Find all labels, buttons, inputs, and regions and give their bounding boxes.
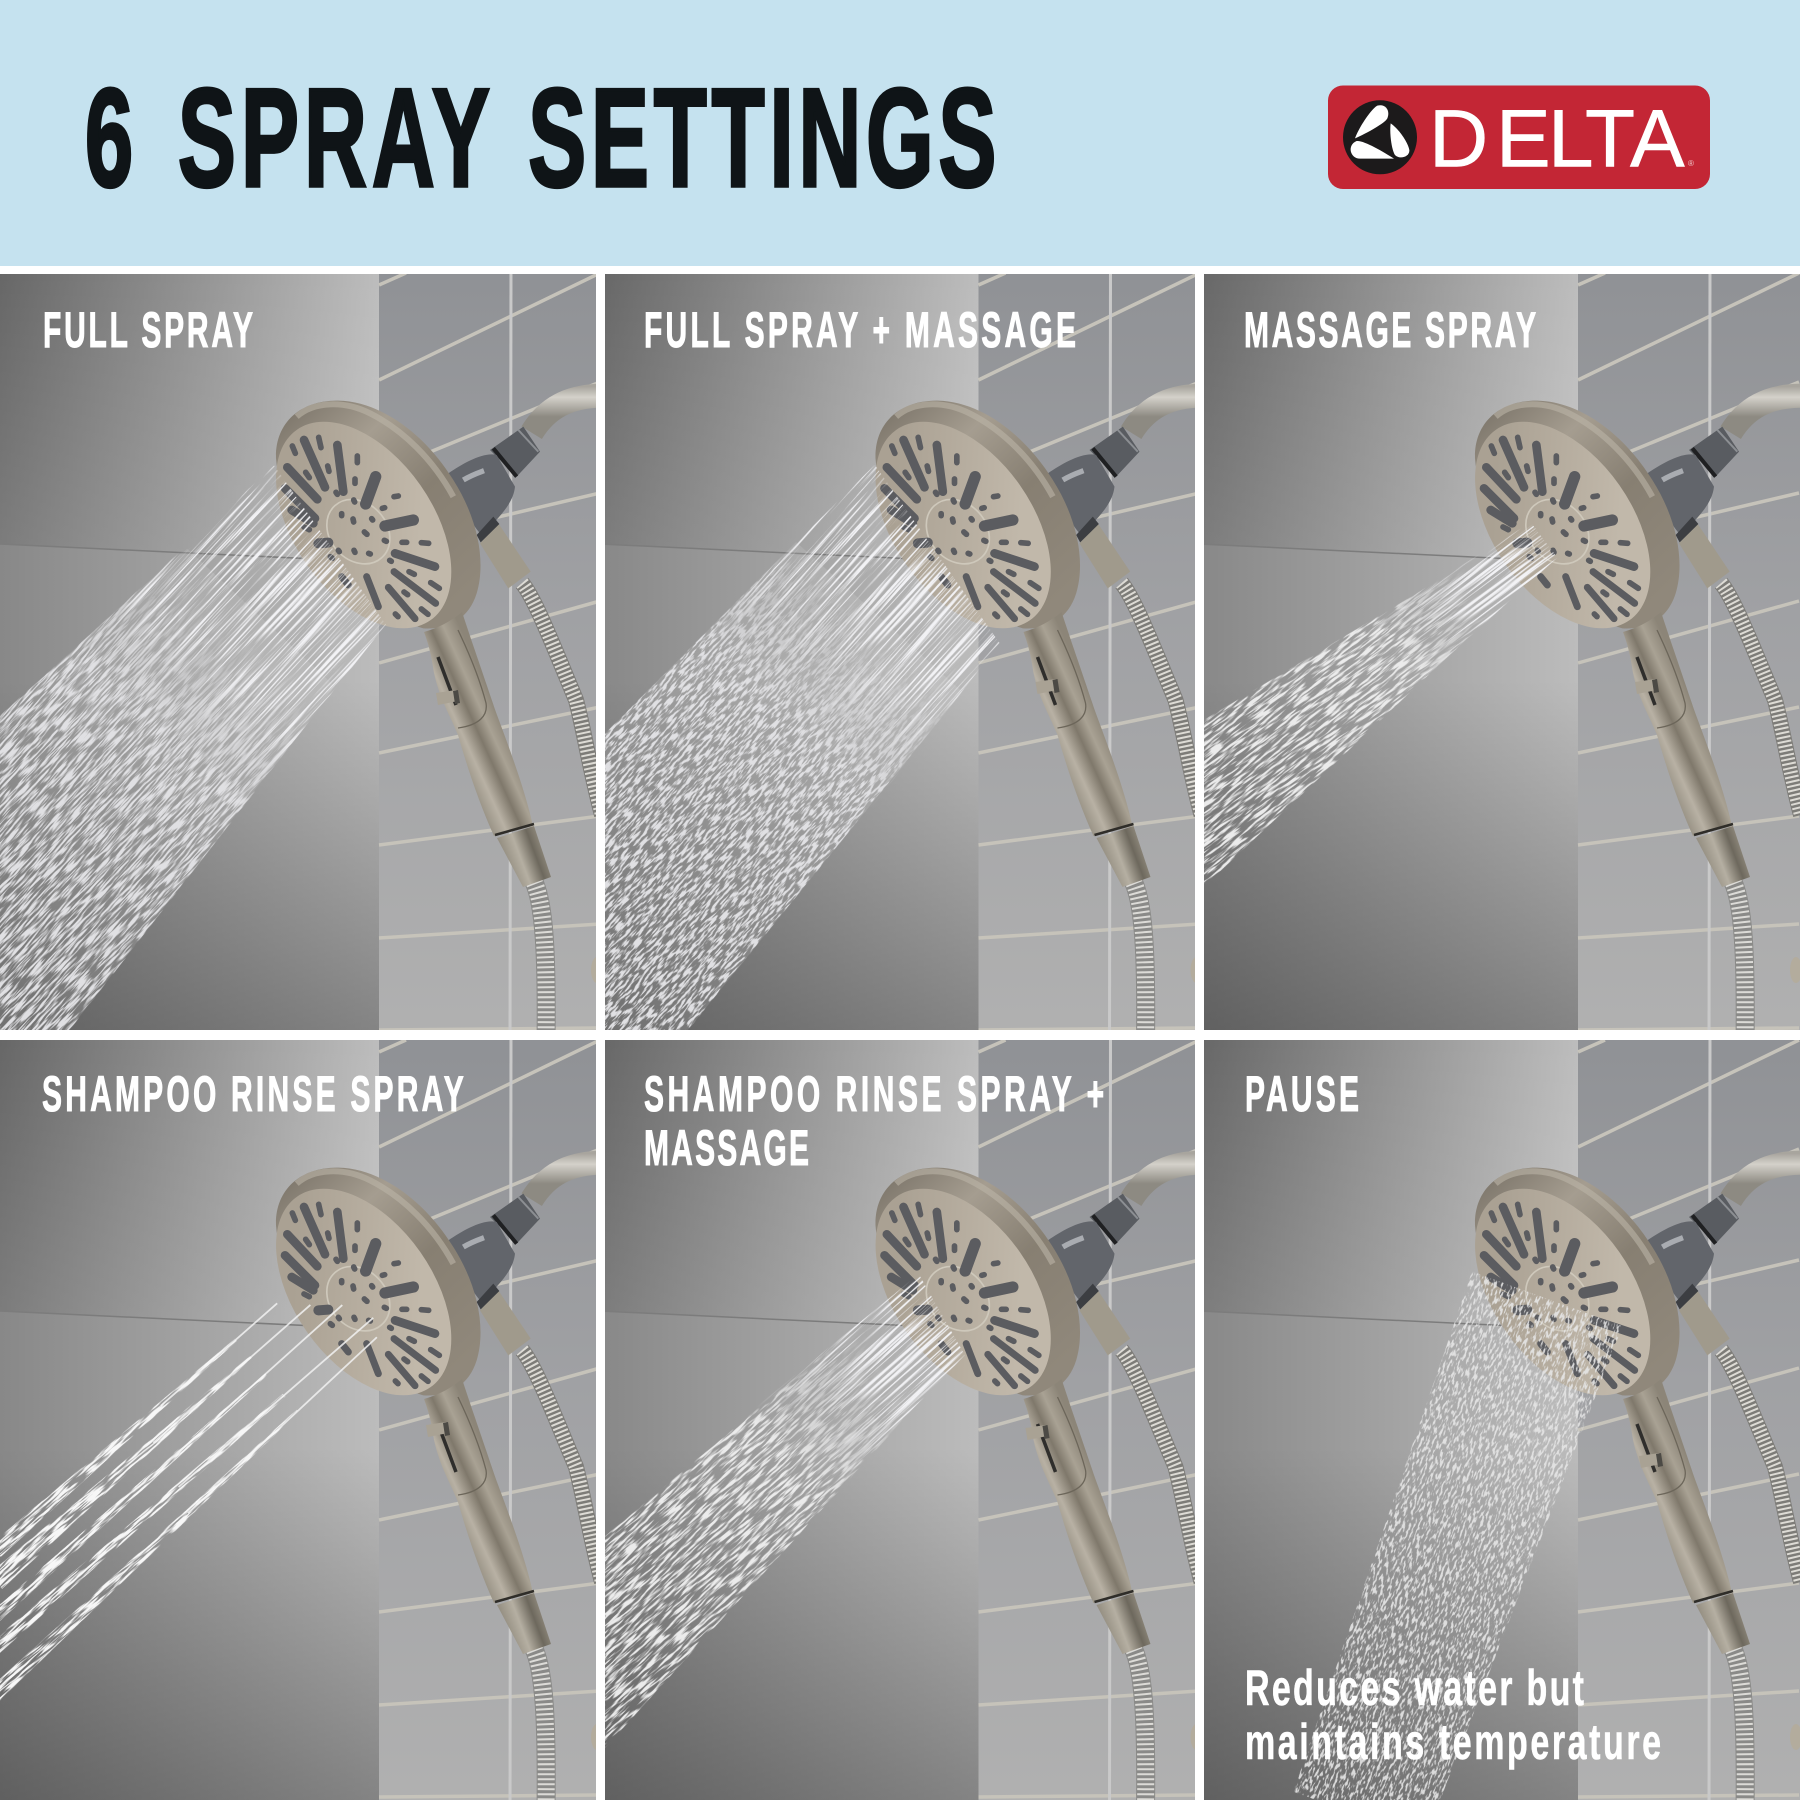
pause description: maintains temperature	[1245, 1715, 1661, 1771]
massage spray photo	[1204, 274, 1800, 1030]
panel: shampoo rinse spray	[0, 1027, 609, 1800]
panel: massage spray	[1117, 260, 1800, 1050]
label: shampoo rinse spray: SHAMPOO RINSE SPRAY	[42, 1066, 464, 1122]
label: full spray: FULL SPRAY	[43, 302, 253, 358]
shampoo rinse spray photo	[0, 1040, 596, 1800]
title: SETTINGS	[528, 60, 996, 216]
registered mark: ®	[1688, 159, 1694, 168]
label: pause: PAUSE	[1245, 1066, 1359, 1122]
header band	[0, 0, 1800, 266]
label: shampoo rinse spray + massage	[644, 1066, 1104, 1176]
title: 6	[85, 60, 133, 216]
logo wordmark: DELTA	[1429, 94, 1685, 185]
label: shampoo rinse spray + massage: MASSAGE	[644, 1120, 809, 1176]
pause description: Reduces water but	[1245, 1661, 1584, 1717]
pause description	[1245, 1661, 1661, 1771]
panel: shampoo rinse spray + massage	[420, 1027, 1208, 1800]
title: SPRAY	[178, 60, 490, 216]
label: massage spray: MASSAGE SPRAY	[1244, 302, 1536, 358]
label: shampoo rinse spray + massage: SHAMPOO RINSE SPRAY +	[644, 1066, 1104, 1122]
label: full spray + massage: FULL SPRAY + MASSAGE	[644, 302, 1076, 358]
pause photo	[1204, 1040, 1800, 1800]
full spray + massage photo	[605, 274, 1195, 1030]
shampoo rinse spray + massage photo	[605, 1040, 1195, 1800]
title	[85, 60, 996, 216]
logo: Delta	[1328, 86, 1710, 189]
full spray photo	[0, 274, 596, 1030]
icon: delta triangle mark	[1343, 100, 1417, 174]
panel: full spray + massage	[407, 260, 1208, 1119]
panel: full spray	[0, 260, 609, 1115]
panel: pause	[1199, 1027, 1800, 1800]
